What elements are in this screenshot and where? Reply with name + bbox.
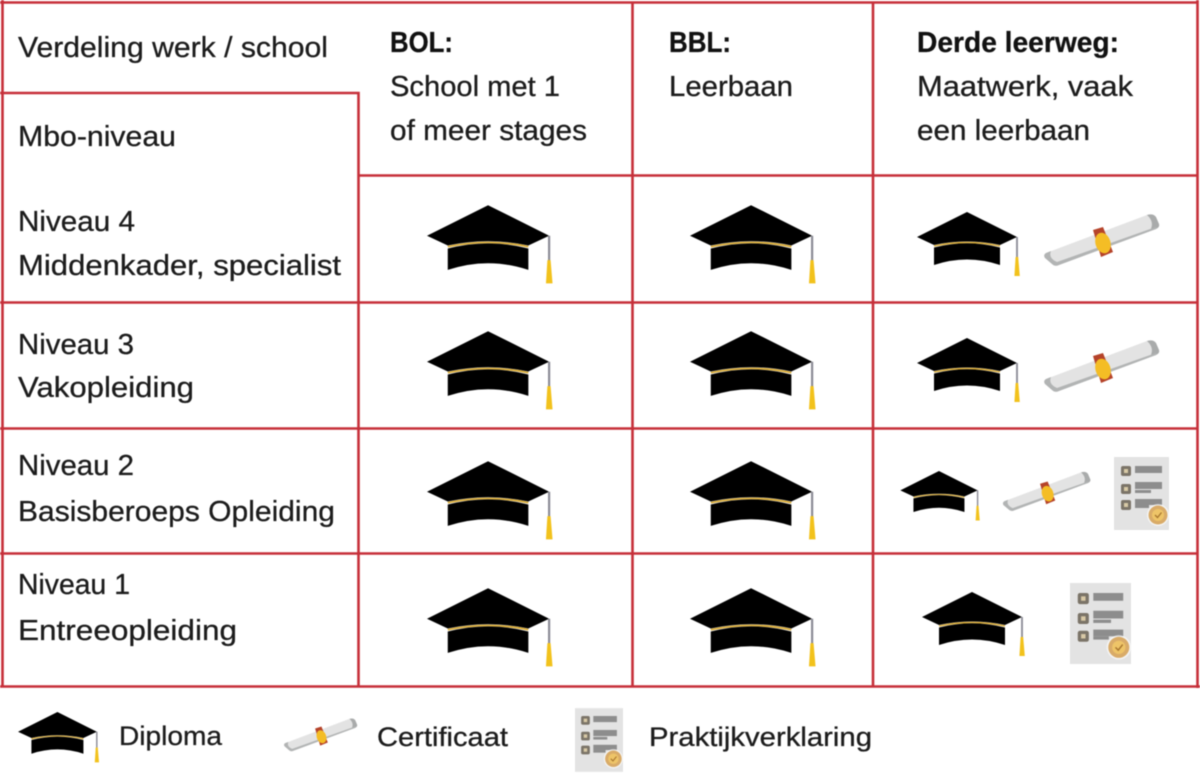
legend: certificaat [284, 718, 509, 752]
column header: BOL: BOL: [390, 27, 453, 59]
icon: diploma cap, niveau 2 BBL [690, 461, 816, 539]
row label: Niveau 4: Middenkader, specialist [18, 250, 341, 282]
icons: niveau 1 derde leerweg [922, 583, 1131, 664]
legend: diploma [18, 712, 223, 762]
row label: Niveau 2: Niveau 2 [18, 450, 134, 482]
column header: Derde leerweg: een leerbaan [917, 115, 1090, 147]
legend: praktijkverklaring: Praktijkverklaring [649, 722, 872, 752]
icons: niveau 3 derde leerweg [917, 338, 1159, 402]
icon: diploma cap, niveau 4 BBL [690, 205, 816, 283]
icon: diploma cap, niveau 4 BOL [427, 205, 553, 283]
row label: Niveau 1: Niveau 1 [18, 569, 130, 601]
row header: Mbo-niveau: Mbo-niveau [18, 121, 176, 153]
icon: diploma cap, niveau 1 BOL [427, 588, 553, 666]
heading: verdeling werk / school: Verdeling werk / school [18, 32, 328, 64]
column header: BOL [390, 27, 587, 147]
row label: Niveau 3: Niveau 3 [18, 329, 134, 361]
row label: Niveau 1: Entreeopleiding [18, 615, 237, 647]
row label: Niveau 4 [18, 206, 341, 282]
icon: diploma cap, niveau 3 BOL [427, 331, 553, 409]
column header: Derde leerweg [917, 27, 1134, 147]
column header: BOL: School met 1 [390, 71, 560, 103]
icon: diploma cap, niveau 3 BBL [690, 331, 816, 409]
row label: Niveau 1 [18, 569, 237, 647]
row label: Niveau 3: Vakopleiding [18, 372, 194, 404]
legend: praktijkverklaring [575, 708, 872, 772]
column header: Derde leerweg: Derde leerweg: [917, 27, 1119, 59]
row label: Niveau 2 [18, 450, 335, 528]
icons: niveau 4 derde leerweg [917, 212, 1159, 276]
legend: diploma: Diploma [119, 721, 223, 751]
column header: Derde leerweg: Maatwerk, vaak [917, 71, 1134, 103]
column header: BBL [669, 27, 793, 103]
row label: Niveau 2: Basisberoeps Opleiding [18, 496, 335, 528]
column header: BOL: of meer stages [390, 115, 587, 147]
icon: diploma cap, niveau 2 BOL [427, 461, 553, 539]
legend: certificaat: Certificaat [377, 722, 509, 752]
icon: diploma cap, niveau 1 BBL [690, 588, 816, 666]
column header: BBL: BBL: [669, 27, 731, 59]
row label: Niveau 4: Niveau 4 [18, 206, 135, 238]
row label: Niveau 3 [18, 329, 194, 404]
column header: BBL: Leerbaan [669, 71, 793, 103]
icons: niveau 2 derde leerweg [900, 457, 1169, 530]
